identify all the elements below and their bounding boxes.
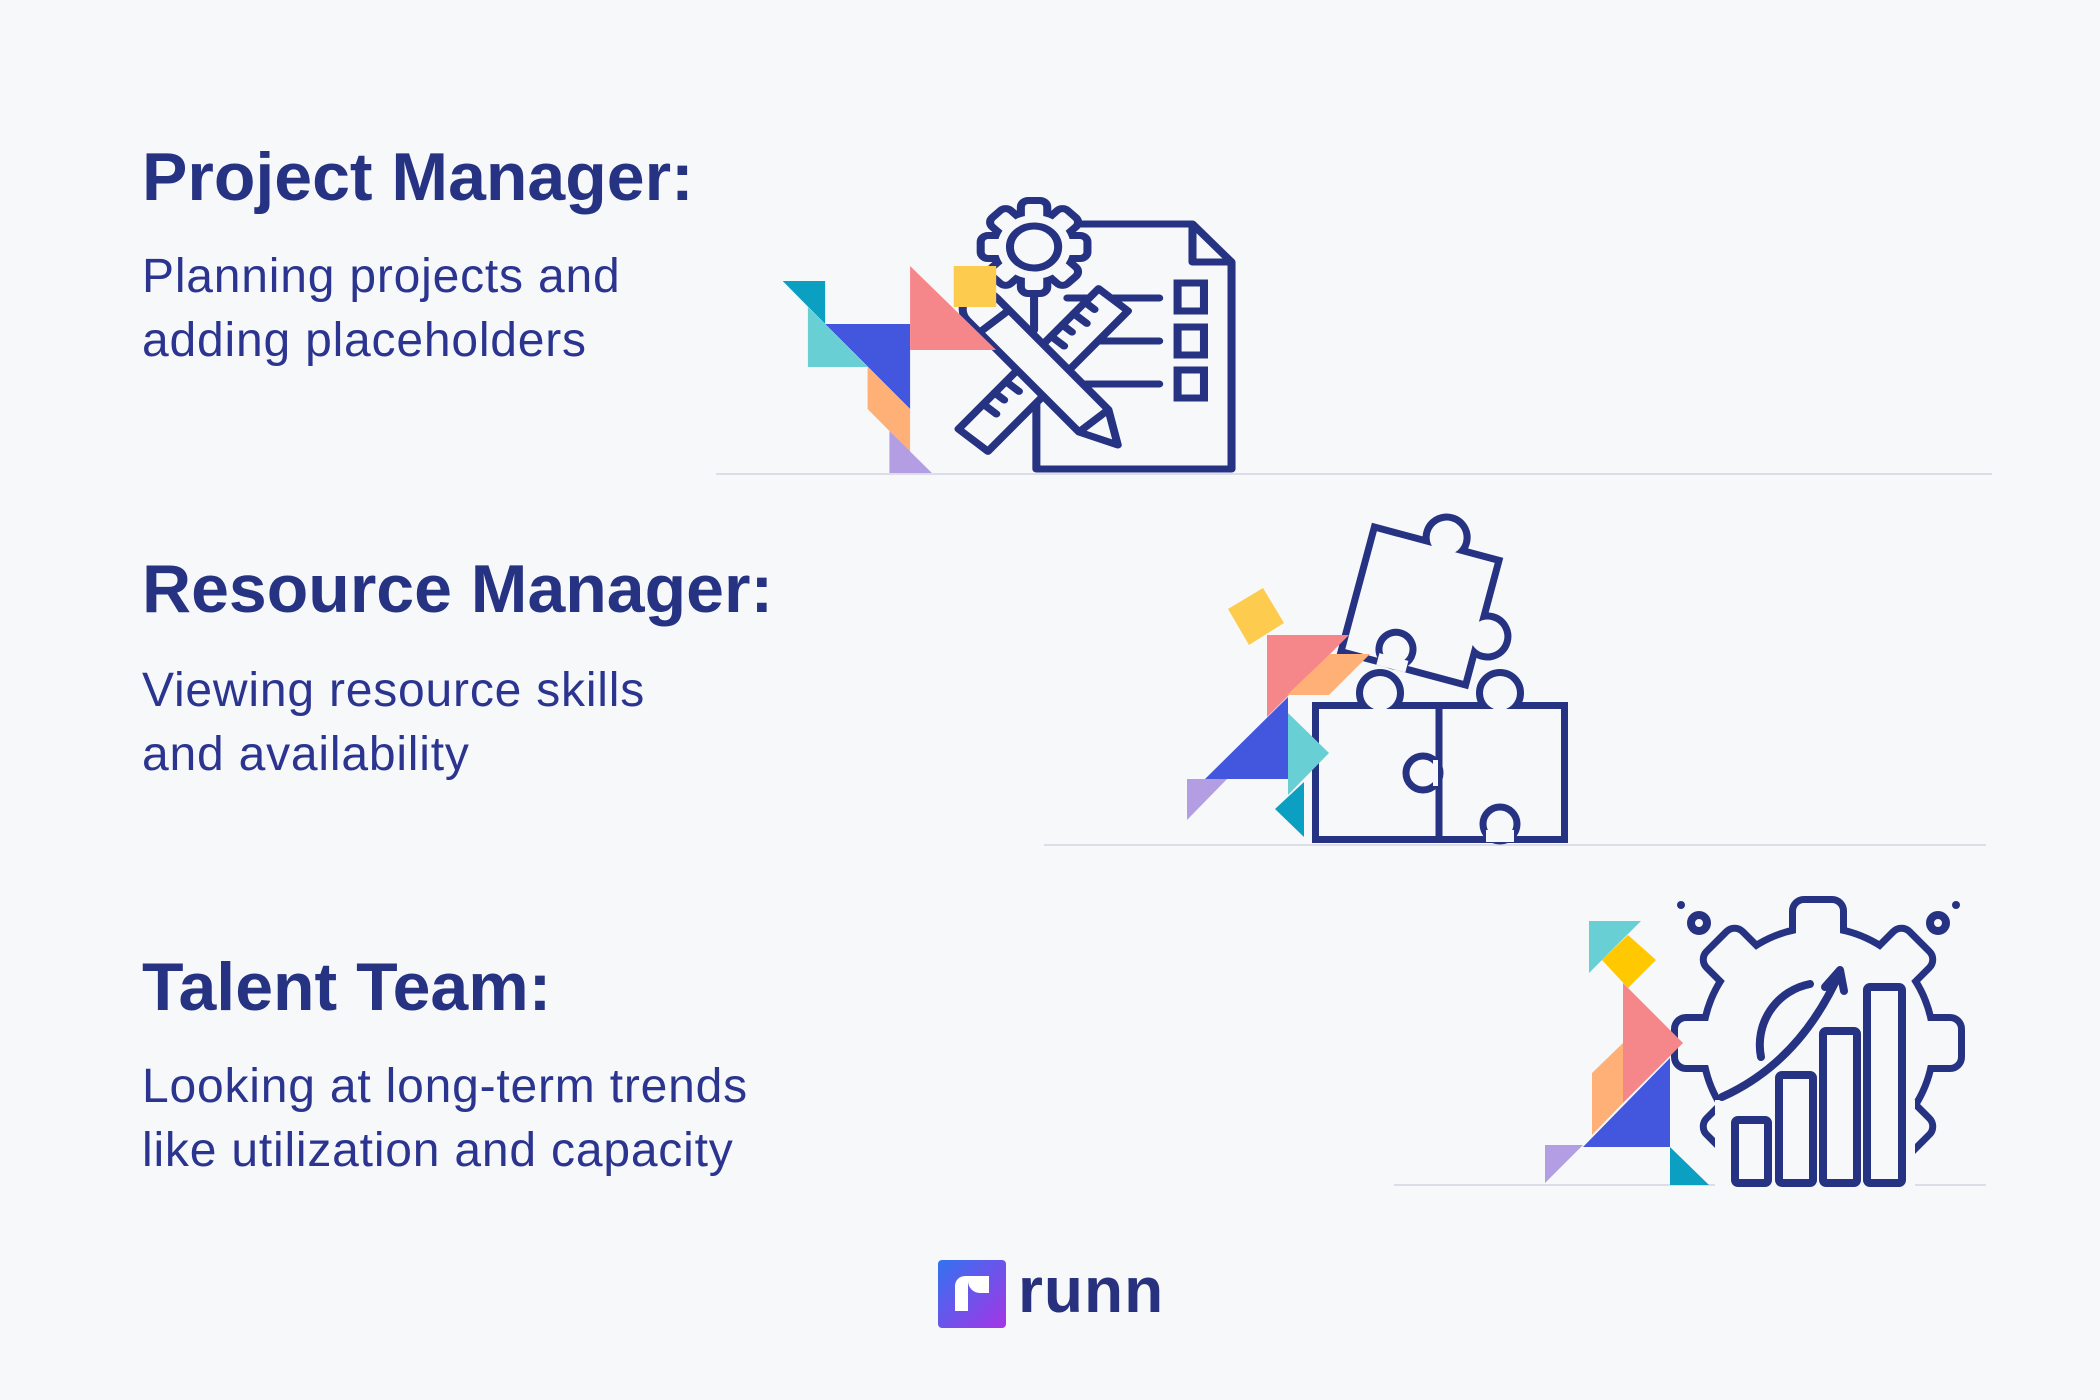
text: resource manager description: Viewing resource skills: [142, 664, 645, 717]
icon: tangram figure 2: [1187, 588, 1370, 837]
icon: tangram figure 3: [1545, 921, 1709, 1185]
heading: Project Manager: Project Manager:: [142, 139, 694, 215]
text: talent team description: Looking at long-term trends: [142, 1060, 748, 1113]
icon: runn logo mark: [938, 1260, 1006, 1328]
icon: puzzle pieces: [1319, 503, 1561, 842]
logo: runn: [938, 1254, 1164, 1328]
icon: gear with growth chart: [1677, 901, 1960, 1190]
text: talent team description: like utilization and capacity: [142, 1124, 734, 1177]
icon: project planning document with tools: [955, 204, 1232, 469]
text: project manager description: Planning projects and: [142, 250, 620, 303]
text: runn wordmark: runn: [1018, 1254, 1164, 1326]
heading: Talent Team: Talent Team:: [142, 949, 551, 1025]
text: talent team description: [142, 1060, 748, 1177]
text: resource manager description: and availability: [142, 728, 470, 781]
text: project manager description: [142, 250, 620, 367]
heading: Resource Manager: Resource Manager:: [142, 551, 773, 627]
icon: tangram figure 1: [783, 266, 996, 473]
text: project manager description: adding placeholders: [142, 314, 587, 367]
text: resource manager description: [142, 664, 645, 781]
